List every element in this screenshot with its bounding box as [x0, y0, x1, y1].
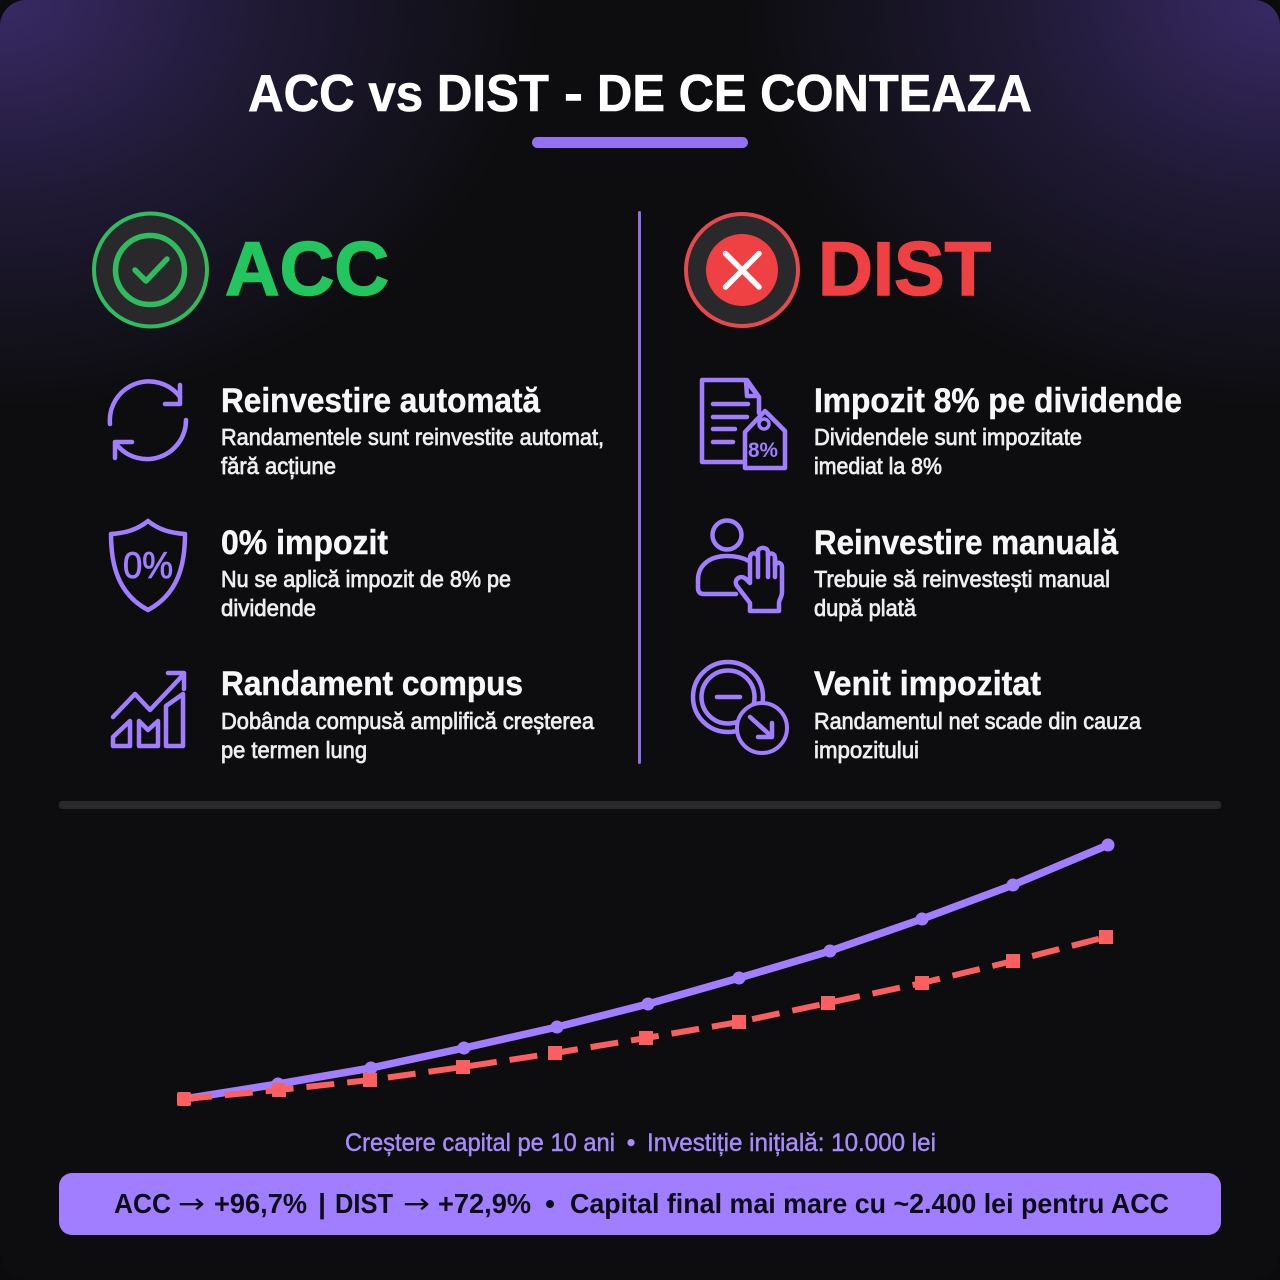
heading: Reinvestire manuală [814, 524, 1119, 562]
summary banner: +72,9% [438, 1188, 531, 1219]
summary banner: → [178, 1187, 205, 1220]
description: Trebuie să reinvestești manual [814, 566, 1110, 592]
icon: shield 0% [111, 521, 185, 610]
center divider [638, 211, 641, 764]
icon: document with 8% tag: 8% [748, 439, 778, 462]
item: Reinvestire manuală [698, 520, 1119, 621]
title: DE CE CONTEAZA [597, 65, 1032, 123]
icon: document with 8% tag [702, 380, 785, 468]
chart caption: Investiție inițială: 10.000 lei [647, 1129, 936, 1157]
item: Impozit 8% [702, 380, 1182, 479]
section divider [59, 801, 1221, 809]
description [221, 424, 604, 479]
icon: coin with down arrow [693, 662, 787, 753]
summary banner [59, 1173, 1221, 1235]
summary banner: +96,7% [214, 1188, 307, 1219]
icon: growth chart [113, 673, 184, 746]
description [814, 708, 1141, 763]
heading: Venit impozitat [814, 665, 1041, 703]
description: fără acțiune [221, 453, 336, 479]
heading: Randament compus [221, 665, 523, 703]
line chart: capital growth [177, 838, 1114, 1106]
description: după plată [814, 595, 916, 621]
summary banner: • [545, 1188, 555, 1219]
summary banner: ACC [114, 1188, 171, 1219]
description [221, 566, 511, 621]
chart caption [345, 1129, 936, 1157]
description [814, 566, 1110, 621]
chart caption: Creștere capital pe 10 ani [345, 1129, 615, 1157]
description: imediat la 8% [814, 453, 942, 479]
icon: DIST cross badge [686, 214, 798, 326]
heading: 0% impozit [221, 524, 388, 562]
DIST line [177, 930, 1113, 1106]
summary banner: → [403, 1187, 430, 1220]
title [248, 65, 1032, 123]
heading: DIST: DIST [818, 227, 991, 312]
summary banner: Capital final mai mare cu ~2.400 lei pentru ACC [570, 1188, 1169, 1219]
description: pe termen lung [221, 737, 367, 763]
description: Randamentul net scade din cauza [814, 708, 1141, 734]
icon: person with raised hand [698, 520, 782, 611]
description: dividende [221, 595, 316, 621]
item: Randament compus [113, 665, 594, 763]
description [814, 424, 1082, 479]
heading: Impozit 8% pe dividende [814, 382, 1182, 420]
title: ACC vs DIST [248, 65, 549, 123]
description: Nu se aplică impozit de 8% pe [221, 566, 511, 592]
chart caption: • [627, 1129, 635, 1157]
item: Venit impozitat [693, 662, 1141, 763]
item: 0% impozit [111, 521, 511, 621]
description: Dobânda compusă amplifică creșterea [221, 708, 594, 734]
icon: ACC check badge [94, 214, 207, 326]
title: - [564, 65, 583, 123]
summary banner: DIST [335, 1188, 393, 1219]
description [221, 708, 594, 763]
icon: refresh arrows [110, 381, 186, 459]
heading: ACC: ACC [225, 227, 389, 312]
title underline [532, 137, 748, 148]
ACC line [184, 838, 1114, 1099]
description: Randamentele sunt reinvestite automat, [221, 424, 604, 450]
panel: ACC [94, 214, 604, 763]
description: Dividendele sunt impozitate [814, 424, 1082, 450]
heading: Reinvestire automată [221, 382, 541, 420]
description: impozitului [814, 737, 919, 763]
item: Reinvestire automată [110, 381, 604, 479]
icon: shield 0%: 0% [123, 545, 173, 586]
panel: DIST [686, 214, 1182, 763]
summary banner: | [318, 1188, 326, 1219]
